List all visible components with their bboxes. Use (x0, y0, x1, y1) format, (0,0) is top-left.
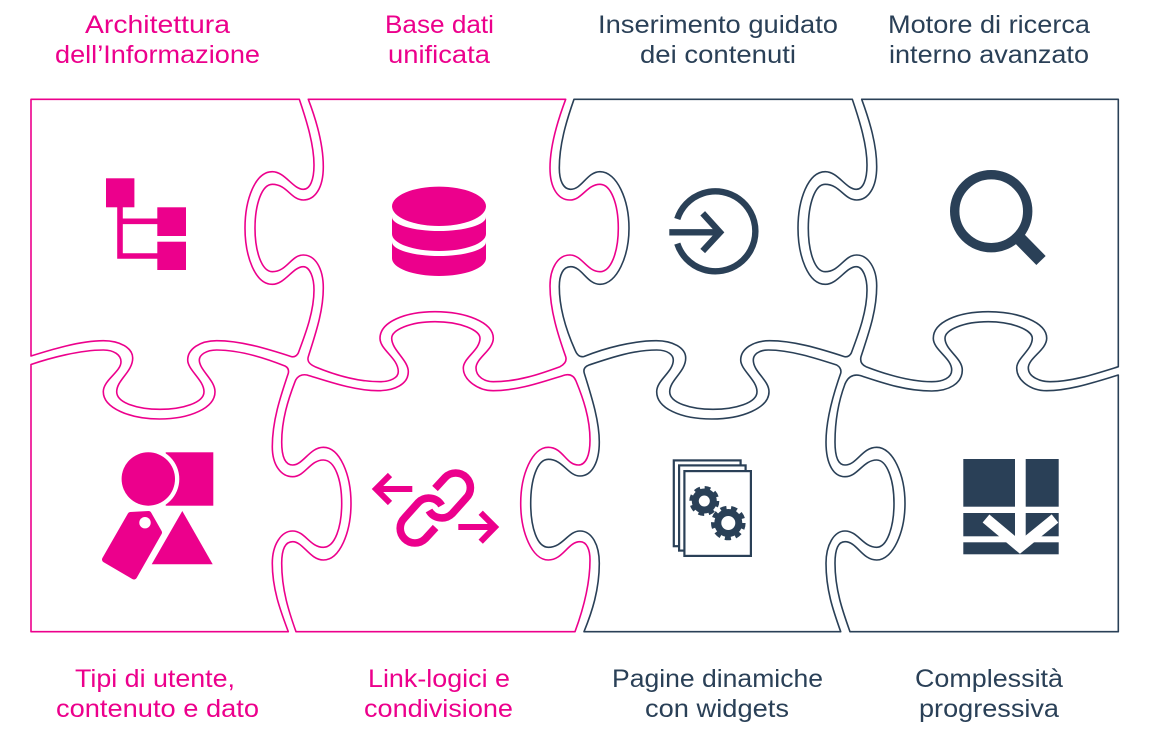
puzzle piece outline 5 (31, 350, 342, 632)
icon: chain link with arrows (376, 473, 495, 543)
icon: hierarchy (106, 178, 186, 270)
caption: Pagine dinamiche con widgets: Pagine dinamiche (612, 665, 823, 693)
caption: Complessità progressiva (915, 665, 1063, 723)
icon: shapes and tag (105, 448, 213, 576)
heading: Motore di ricerca interno avanzato: interno avanzato (889, 41, 1089, 69)
heading: Base dati unificata: Base dati (385, 11, 494, 39)
caption: Pagine dinamiche con widgets (612, 665, 823, 723)
caption: Link-logici e condivisione (364, 665, 513, 723)
heading: Inserimento guidato dei contenuti: dei contenuti (640, 41, 796, 69)
heading: Inserimento guidato dei contenuti: Inserimento guidato (598, 11, 838, 39)
icon: enter arrow in circle (669, 191, 755, 271)
puzzle piece outline 3 (559, 99, 867, 409)
panel: pagine dinamiche (531, 350, 894, 632)
caption: Tipi di utente, contenuto e dato (56, 665, 259, 723)
heading: Motore di ricerca interno avanzato (888, 11, 1090, 69)
heading: Base dati unificata (385, 11, 494, 69)
panel: base dati unificata (255, 99, 618, 382)
heading: Inserimento guidato dei contenuti (598, 11, 838, 69)
heading: Architettura dell'Informazione: Architettura (85, 11, 230, 39)
icon: magnifier (955, 175, 1041, 260)
puzzle piece outline 2 (255, 99, 618, 382)
icon: progressive blocks with arrow (963, 459, 1059, 554)
panel: architettura dell'informazione (31, 99, 314, 409)
puzzle piece outline 6 (282, 322, 590, 632)
caption: Tipi di utente, contenuto e dato: contenuto e dato (56, 695, 259, 723)
puzzle piece outline 4 (808, 99, 1118, 382)
heading: Base dati unificata: unificata (388, 41, 490, 69)
puzzle piece outline 8 (835, 322, 1118, 632)
icon: pages with gears (674, 460, 751, 556)
panel: inserimento guidato (559, 99, 867, 409)
caption: Complessità progressiva: progressiva (919, 695, 1059, 723)
heading: Architettura dell'Informazione (55, 11, 260, 69)
puzzle piece outline 7 (531, 350, 894, 632)
puzzle piece outline 1 (31, 99, 314, 409)
heading: Motore di ricerca interno avanzato: Motore di ricerca (888, 11, 1090, 39)
panel: tipi di utente (31, 350, 342, 632)
panel: link-logici (282, 322, 590, 632)
caption: Tipi di utente, contenuto e dato: Tipi di utente, (75, 665, 235, 693)
panel: complessità progressiva (835, 322, 1118, 632)
panel: motore di ricerca (808, 99, 1118, 382)
caption: Link-logici e condivisione: Link-logici e (368, 665, 510, 693)
heading: Architettura dell'Informazione: dell’Informazione (55, 41, 260, 69)
caption: Link-logici e condivisione: condivisione (364, 695, 513, 723)
caption: Pagine dinamiche con widgets: con widgets (645, 695, 789, 723)
caption: Complessità progressiva: Complessità (915, 665, 1063, 693)
icon: database (392, 187, 486, 276)
